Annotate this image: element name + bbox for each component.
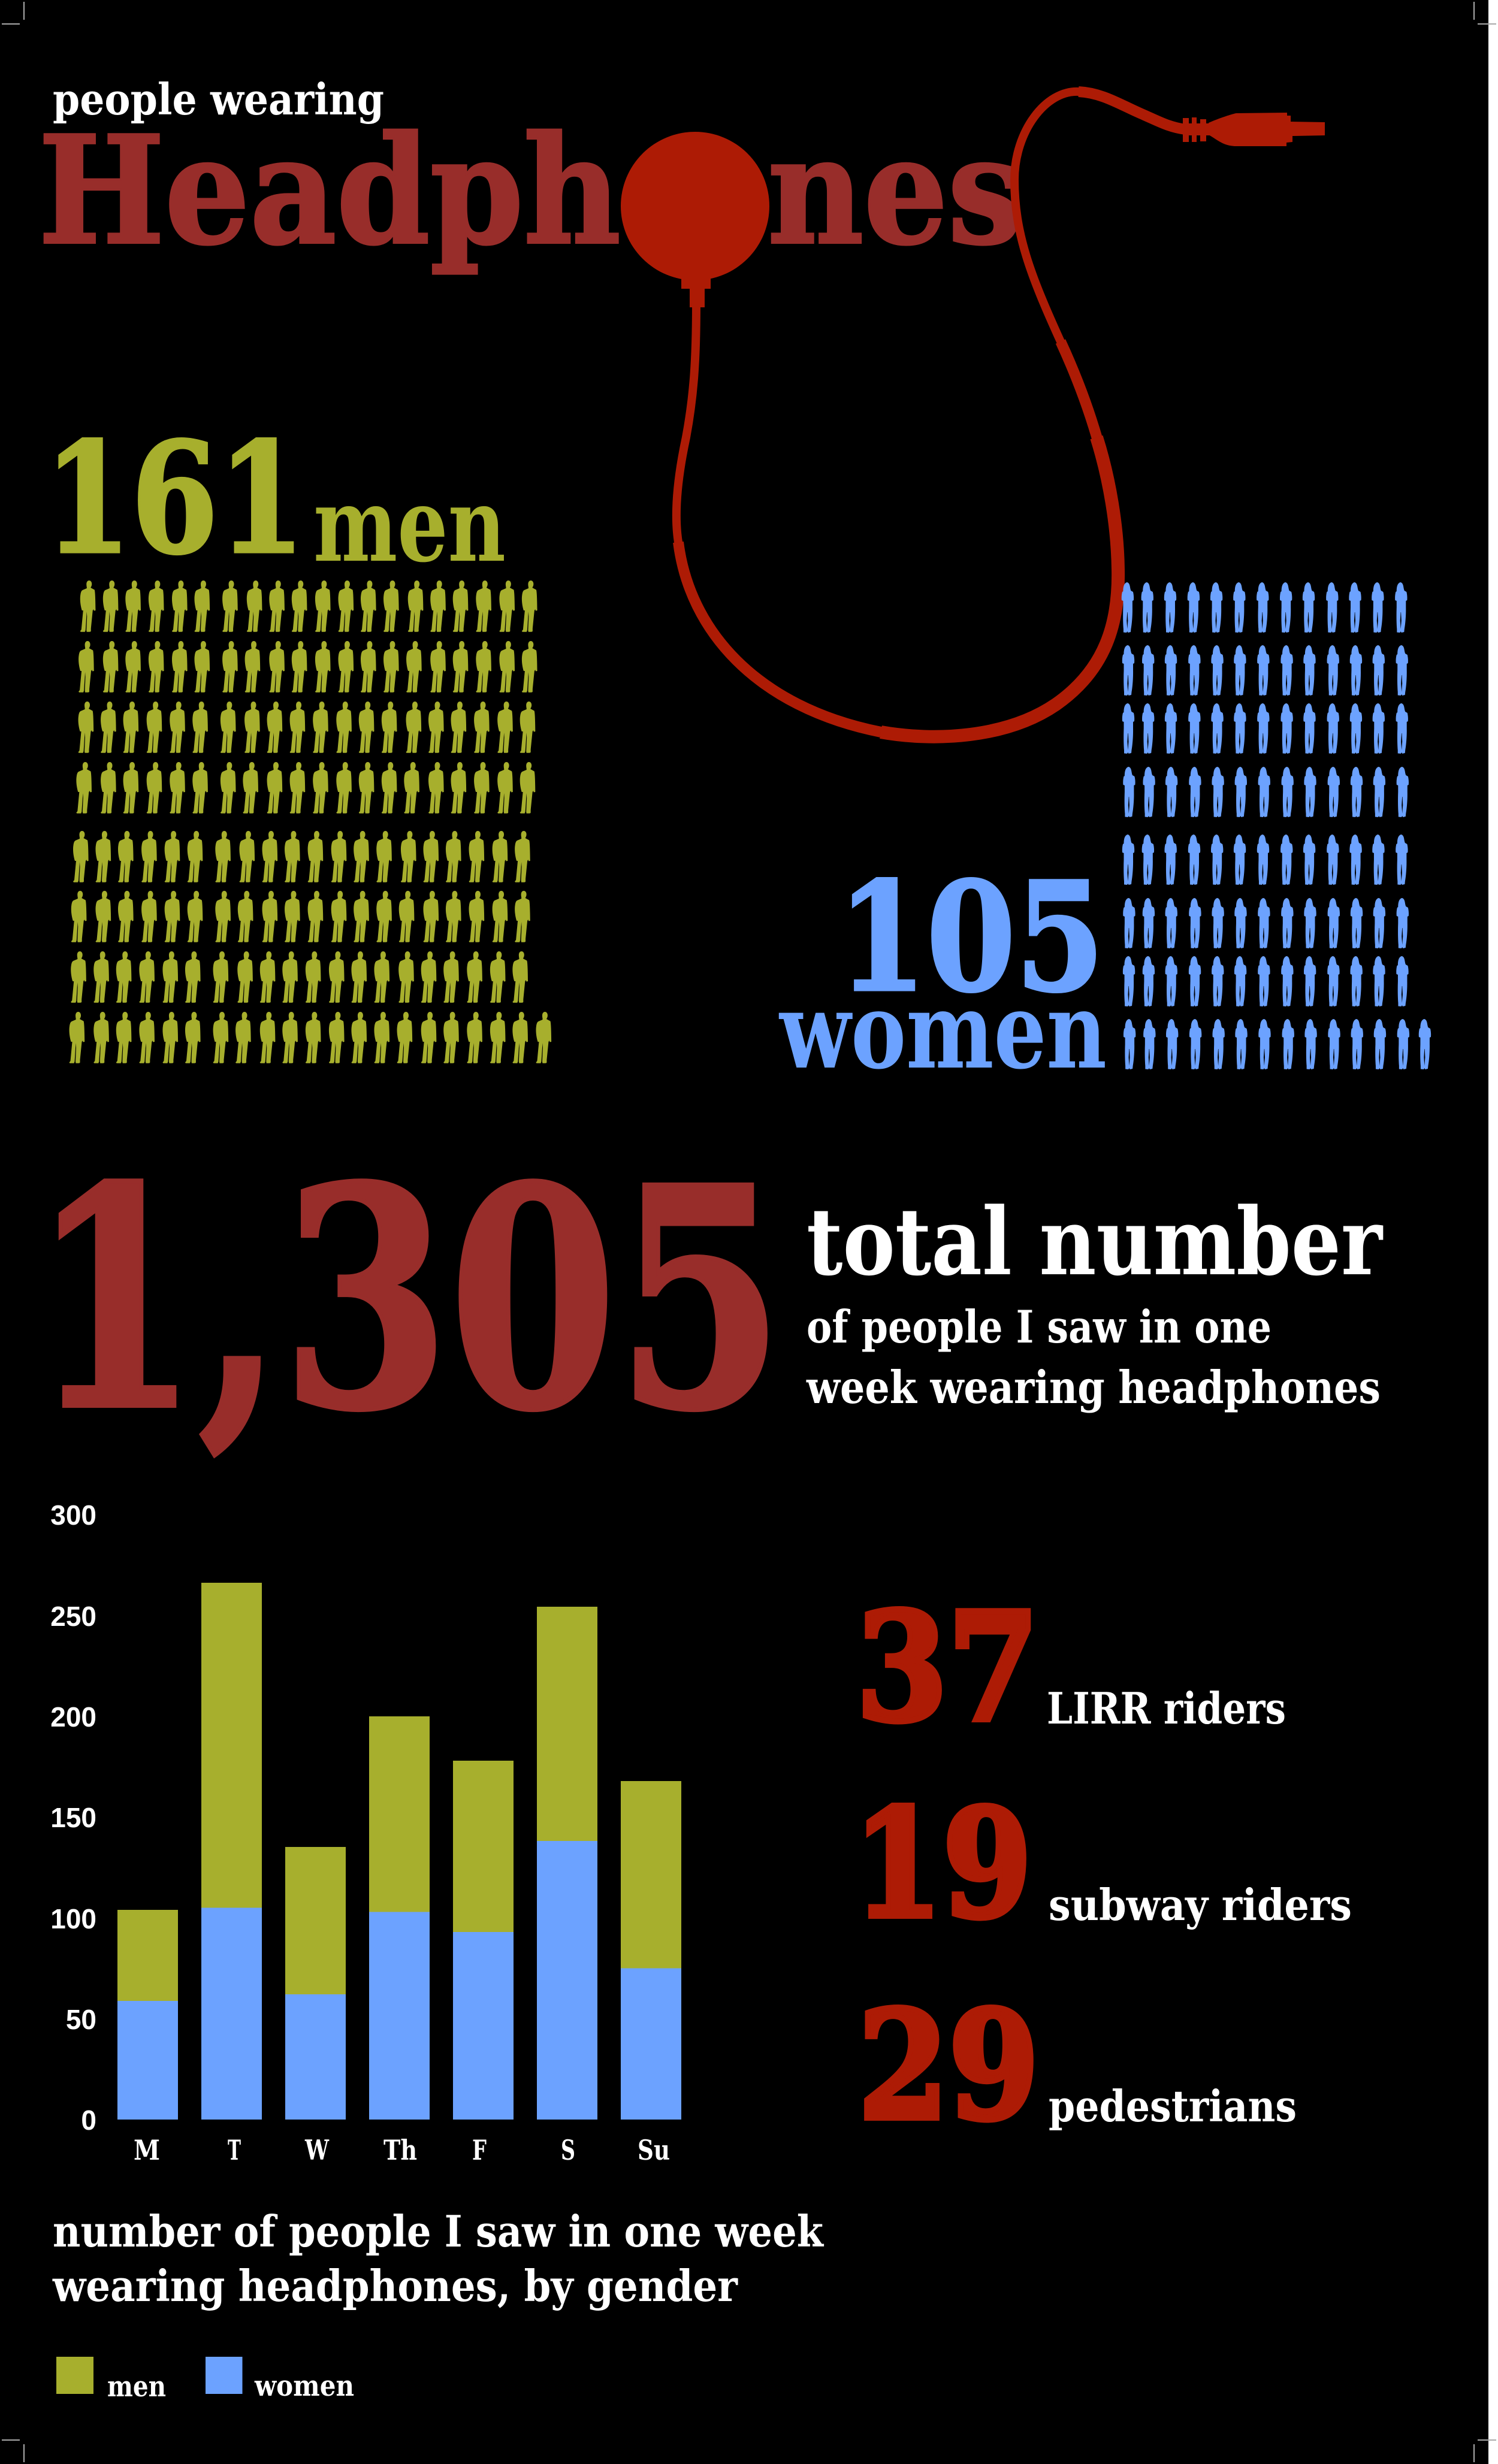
chart caption: number of people I saw in one week xyxy=(53,2206,824,2257)
bar chart: people per day by gender xyxy=(50,1499,681,2166)
legend: men xyxy=(107,2370,166,2403)
title: Headphones: Headph xyxy=(38,104,621,278)
x axis labels: T xyxy=(228,2134,241,2166)
y axis labels: 100 xyxy=(50,1903,96,1934)
stat: 19 subway riders: subway riders xyxy=(1049,1879,1352,1930)
x axis labels: S xyxy=(561,2134,575,2166)
x axis labels: F xyxy=(472,2134,487,2166)
stat: 105 women: women xyxy=(778,969,1107,1093)
y axis labels: 200 xyxy=(50,1701,96,1733)
chart caption: wearing headphones, by gender xyxy=(52,2260,738,2311)
stat: 19 subway riders xyxy=(853,1777,1352,1951)
stat: 37 LIRR riders: 37 xyxy=(856,1580,1039,1755)
x axis labels: Th xyxy=(383,2134,417,2166)
bars: Tuesday xyxy=(201,1583,262,2120)
legend: women xyxy=(254,2369,354,2403)
stat: 161 men: men xyxy=(313,465,506,585)
stat: 161 men: 161 xyxy=(44,409,305,588)
stat: 161 men xyxy=(44,409,506,588)
icon: headphone earbud and cord xyxy=(621,92,1325,737)
y axis labels: 50 xyxy=(66,2004,96,2035)
stat: 37 LIRR riders xyxy=(856,1580,1286,1755)
bars: Wednesday xyxy=(285,1847,346,2120)
pictogram: 105 women xyxy=(1122,582,1431,1069)
legend xyxy=(56,2357,354,2403)
title: Headphones xyxy=(38,104,1022,278)
bars: Thursday xyxy=(369,1716,430,2120)
chart caption xyxy=(52,2206,824,2311)
stat: 29 pedestrians: 29 xyxy=(858,1979,1039,2153)
y axis labels: 0 xyxy=(81,2105,96,2136)
heading: total number: total number xyxy=(807,1187,1384,1296)
title: Headphones: o xyxy=(653,104,737,278)
text block: description of total: week wearing headphones xyxy=(806,1361,1381,1414)
bars: Friday xyxy=(453,1761,514,2120)
stat: 37 LIRR riders: LIRR riders xyxy=(1047,1683,1286,1734)
x axis labels: W xyxy=(304,2134,330,2166)
text block: description of total xyxy=(806,1301,1381,1414)
y axis labels: 250 xyxy=(50,1601,96,1632)
y axis labels: 150 xyxy=(50,1802,96,1833)
stat: 29 pedestrians xyxy=(858,1979,1297,2153)
title: Headphones: nes xyxy=(768,104,1022,278)
stat: 29 pedestrians: pedestrians xyxy=(1049,2081,1297,2132)
pictogram: 161 men xyxy=(70,581,551,1063)
x axis labels: M xyxy=(134,2134,160,2166)
y axis labels xyxy=(50,1499,96,2136)
text block: description of total: of people I saw in one xyxy=(807,1301,1272,1353)
bars: Sunday xyxy=(621,1781,681,2120)
x axis labels: Su xyxy=(638,2134,670,2166)
x axis labels xyxy=(134,2134,670,2166)
subtitle: people wearing: people wearing xyxy=(53,74,384,125)
stat: 105 women: 105 xyxy=(838,849,1104,1025)
y axis labels: 300 xyxy=(50,1499,96,1531)
bars: Monday xyxy=(117,1910,178,2120)
stat: 105 women xyxy=(778,849,1107,1093)
big number: 1,305: 1,305 xyxy=(31,1122,784,1477)
bars: Saturday xyxy=(537,1607,597,2120)
stat: 19 subway riders: 19 xyxy=(853,1777,1032,1951)
